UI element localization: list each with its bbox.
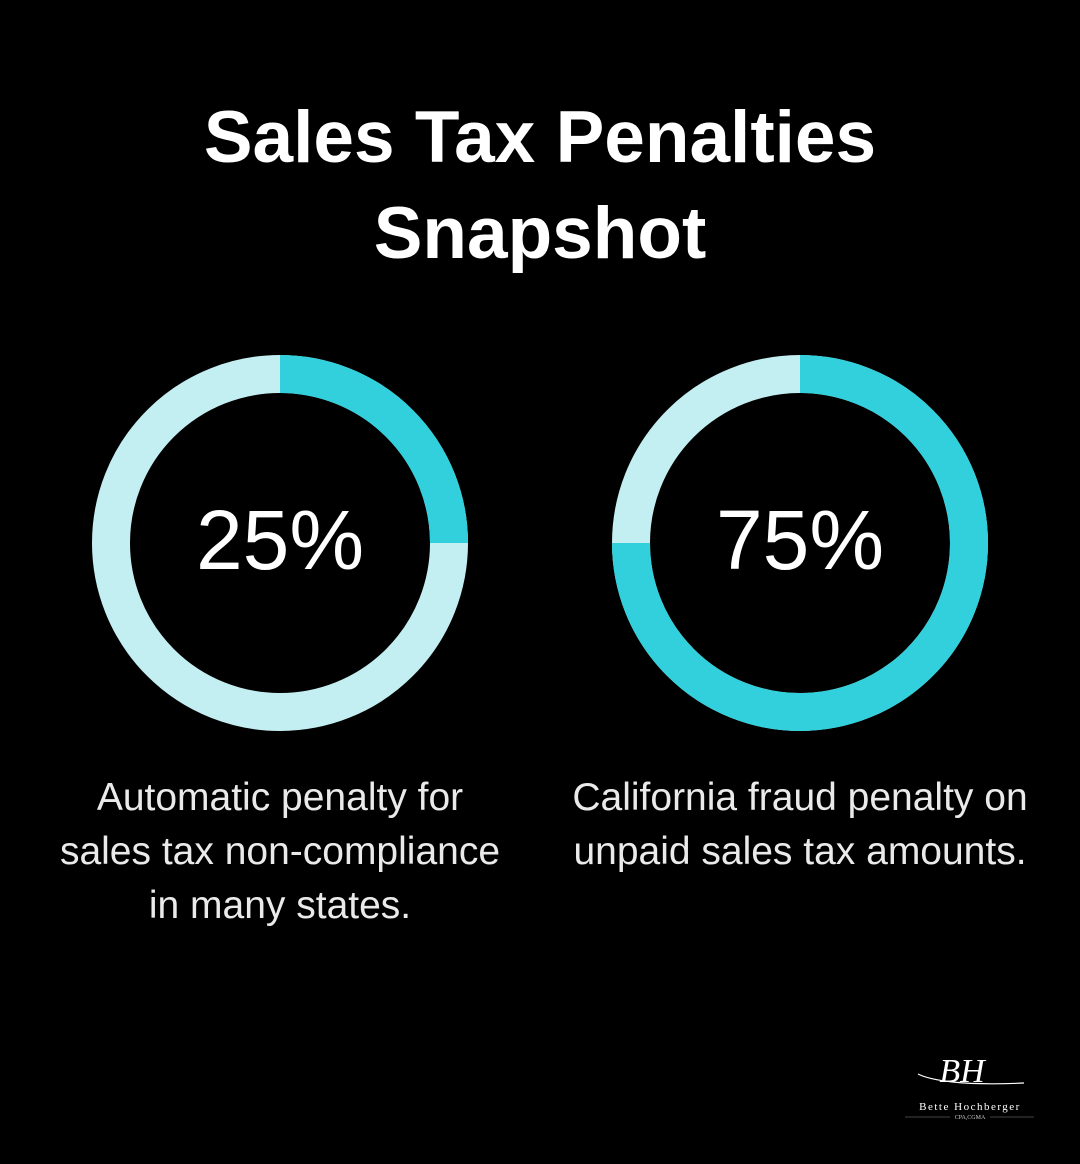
title: Sales Tax Penalties — [204, 97, 876, 178]
caption: 25%: Automatic penalty for — [97, 776, 463, 819]
logo: Bette Hochberger — [919, 1101, 1021, 1113]
logo: BH — [939, 1053, 987, 1090]
caption: 75%: California fraud penalty on — [572, 776, 1028, 819]
title — [204, 97, 876, 274]
caption: 25%: sales tax non-compliance — [60, 830, 500, 873]
donut: 25% — [111, 374, 449, 712]
donut: 75%: 75% — [716, 493, 884, 587]
caption: 75% — [572, 776, 1028, 873]
caption: 25%: in many states. — [149, 884, 411, 927]
donut: 25%: 25% — [196, 493, 364, 587]
logo: CPA,CGMA — [955, 1115, 986, 1121]
caption: 25% — [60, 776, 500, 927]
caption: 75%: unpaid sales tax amounts. — [573, 830, 1027, 873]
logo — [905, 1053, 1034, 1121]
title: Snapshot — [374, 193, 706, 274]
donut: 75% — [631, 374, 969, 712]
